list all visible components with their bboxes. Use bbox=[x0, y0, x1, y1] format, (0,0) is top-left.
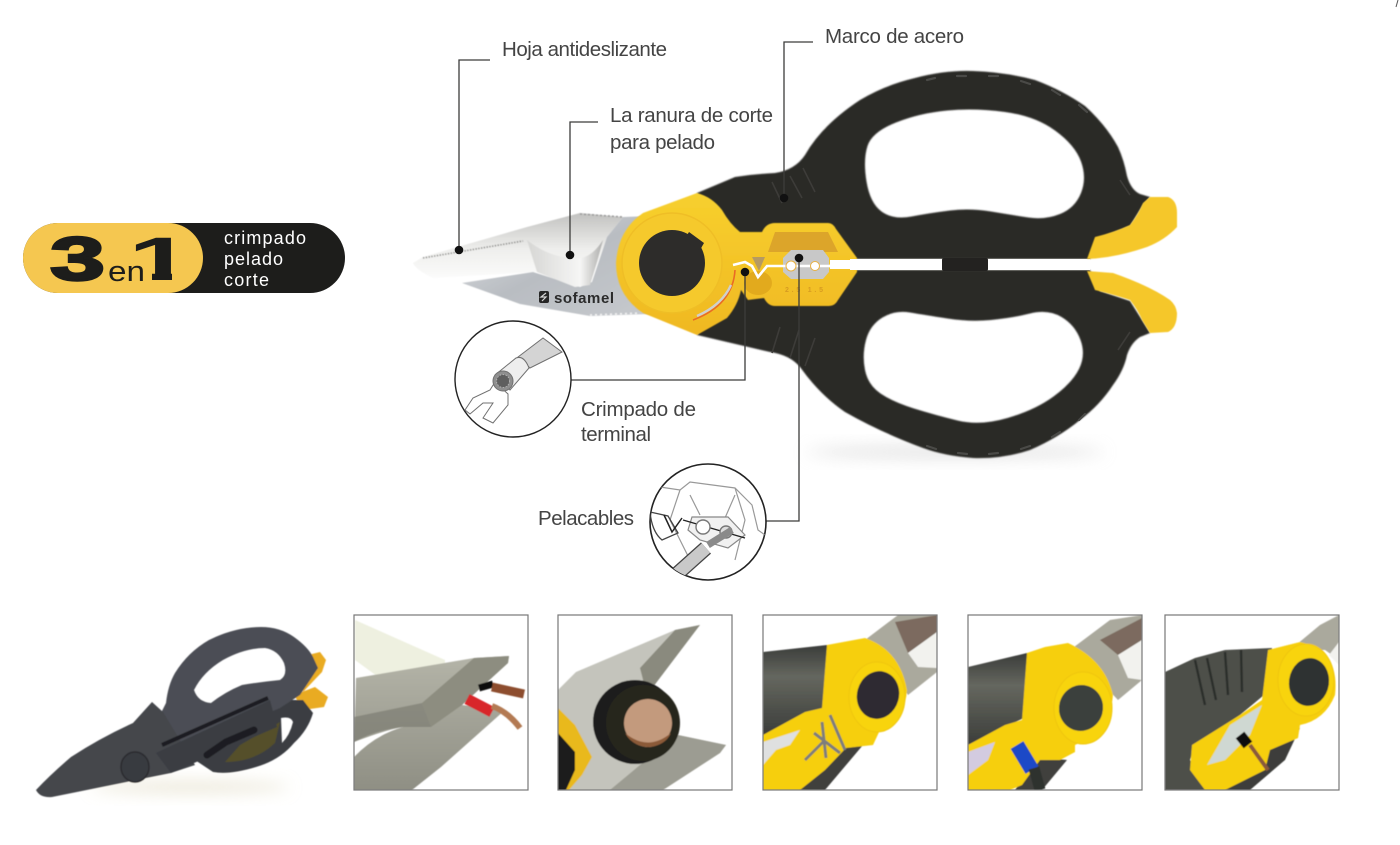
badge: 3 en 1: crimpado bbox=[224, 228, 306, 248]
callout: crimpado de terminal: terminal bbox=[581, 423, 651, 446]
upper loop handle bbox=[160, 627, 318, 750]
callout: pelacables: Pelacables bbox=[538, 507, 634, 530]
badge: 3 en 1: pelado bbox=[224, 249, 283, 269]
floor shadow bbox=[90, 781, 290, 793]
leader: Hoja antideslizante: Hoja antideslizante bbox=[502, 38, 667, 61]
photo: closed tool with sheath bbox=[36, 627, 328, 797]
leader: La ranura de corte para pelado: La ranura de corte bbox=[610, 104, 773, 127]
badge: 3 en 1 bbox=[23, 223, 345, 293]
blades bbox=[413, 213, 650, 316]
steel arc over frame bbox=[693, 270, 735, 320]
yellow frame bbox=[616, 193, 857, 335]
pivot bbox=[622, 213, 722, 313]
handle grip texture bbox=[927, 76, 1087, 454]
corner mark bbox=[1396, 0, 1398, 7]
leader: La ranura de corte para pelado bbox=[566, 104, 773, 259]
crimp recess bbox=[744, 271, 772, 295]
badge: 3 en 1: 3 bbox=[50, 226, 105, 293]
crimp detail drawing bbox=[455, 321, 571, 437]
photo frame: cutting thick cable bbox=[558, 615, 732, 790]
scissors product illustration bbox=[413, 71, 1177, 458]
ground shadow bbox=[805, 446, 1105, 458]
leader: La ranura de corte para pelado: para pelado bbox=[610, 131, 715, 154]
frame recess bbox=[768, 232, 838, 252]
yellow tips bbox=[294, 652, 328, 710]
slot and button bbox=[207, 730, 254, 755]
embossed sizes: 2.5 1.5 bbox=[785, 287, 823, 294]
photo frame: crimping blue terminal bbox=[968, 615, 1142, 790]
leader: Marco de acero: Marco de acero bbox=[825, 25, 964, 48]
callout: crimpado de terminal: Crimpado de bbox=[581, 398, 696, 421]
badge: 3 en 1: 1 bbox=[128, 225, 192, 293]
leader: Hoja antideslizante bbox=[455, 38, 667, 254]
photo frame: crimping fork terminal bbox=[763, 615, 937, 790]
white slot bbox=[733, 257, 1090, 277]
top handle bbox=[697, 71, 1150, 259]
photo frame: stripping wire bbox=[1165, 615, 1339, 790]
callout: crimpado de terminal bbox=[455, 268, 749, 446]
sheath clip plate bbox=[156, 700, 277, 773]
sheath body bbox=[36, 702, 195, 797]
leader: Marco de acero bbox=[780, 25, 964, 202]
stripper plate bbox=[783, 250, 830, 279]
blade logo: sofamel bbox=[554, 290, 614, 307]
olive interior bbox=[225, 722, 280, 762]
photo frame: cutting wires bbox=[354, 615, 528, 790]
stripper detail drawing bbox=[650, 464, 772, 582]
bottom handle bbox=[697, 270, 1150, 458]
yellow handle tips bbox=[1087, 197, 1177, 333]
callout: pelacables bbox=[538, 254, 803, 582]
lower handle bbox=[195, 700, 313, 773]
badge: 3 en 1: en bbox=[108, 256, 145, 288]
badge: 3 en 1: corte bbox=[224, 270, 269, 290]
